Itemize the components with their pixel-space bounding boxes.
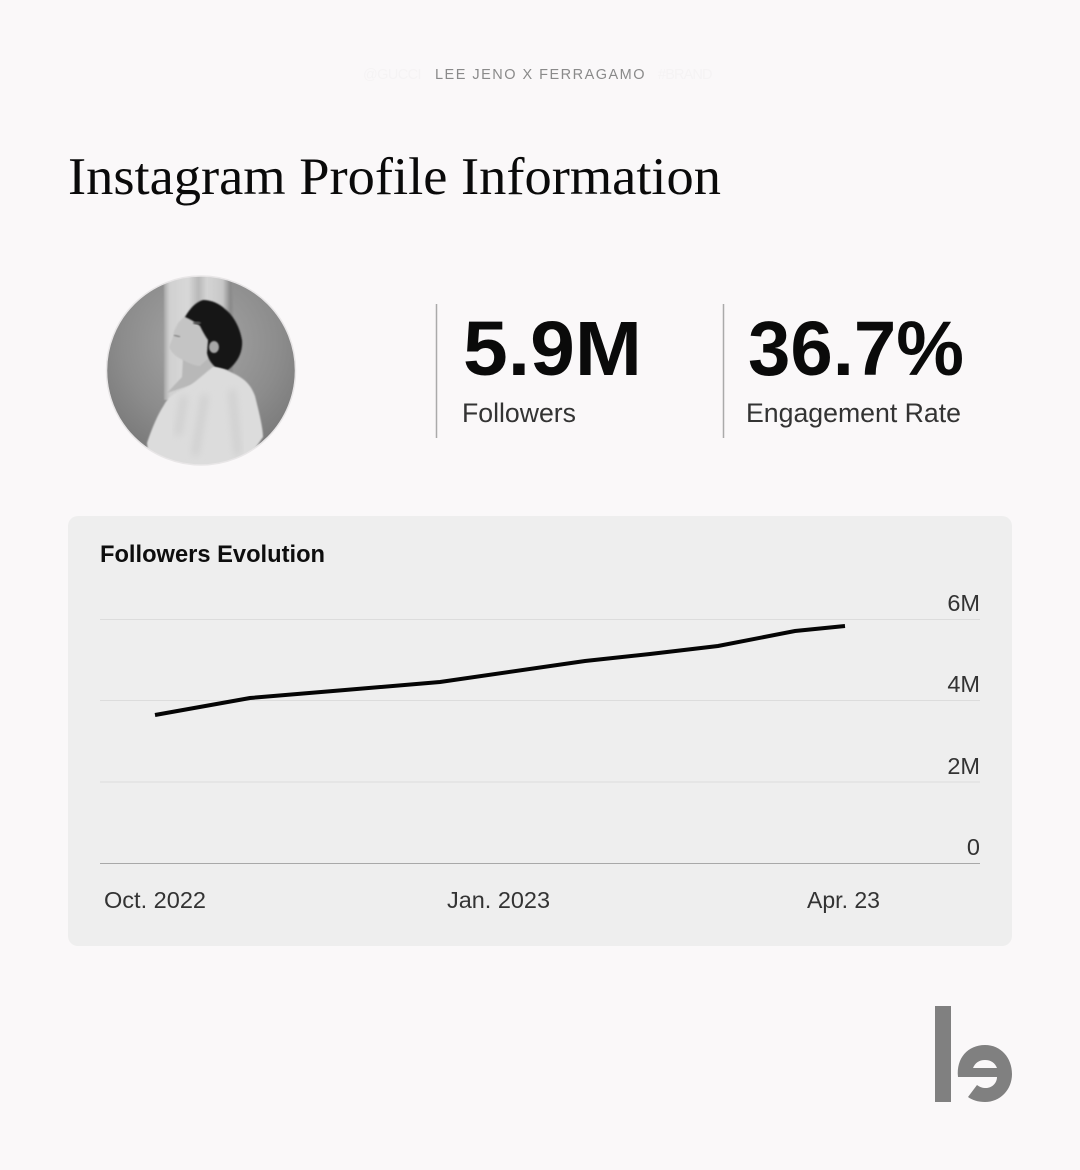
followers stat: Followers [462,398,576,428]
x axis labels: Oct. 2022 [104,887,206,913]
y axis labels [947,590,980,860]
header tag line: LEE JENO X FERRAGAMO [435,67,646,83]
y axis labels: 2M [947,753,980,779]
engagement rate stat: Engagement Rate [746,398,961,428]
profile photo [105,275,297,470]
y axis labels: 6M [947,590,980,616]
icon: brand logo [935,1006,1012,1102]
header tag line: @GUCCI [363,67,423,83]
engagement rate stat [724,304,964,438]
avatar ring [106,276,296,465]
y axis labels: 4M [947,671,980,697]
followers line chart [155,626,845,715]
x axis labels: Apr. 23 [807,887,880,913]
engagement rate stat: 36.7% [748,306,964,392]
followers stat [436,304,642,438]
y axis labels: 0 [967,834,980,860]
x axis labels: Jan. 2023 [447,887,550,913]
title: Instagram Profile Information [68,148,721,206]
panel: followers evolution [68,516,1012,946]
panel heading: Followers Evolution [100,541,325,568]
x axis labels [104,887,880,913]
header tag line: #BRAND [658,67,714,83]
header tag line [363,67,714,83]
followers stat: 5.9M [463,306,642,392]
